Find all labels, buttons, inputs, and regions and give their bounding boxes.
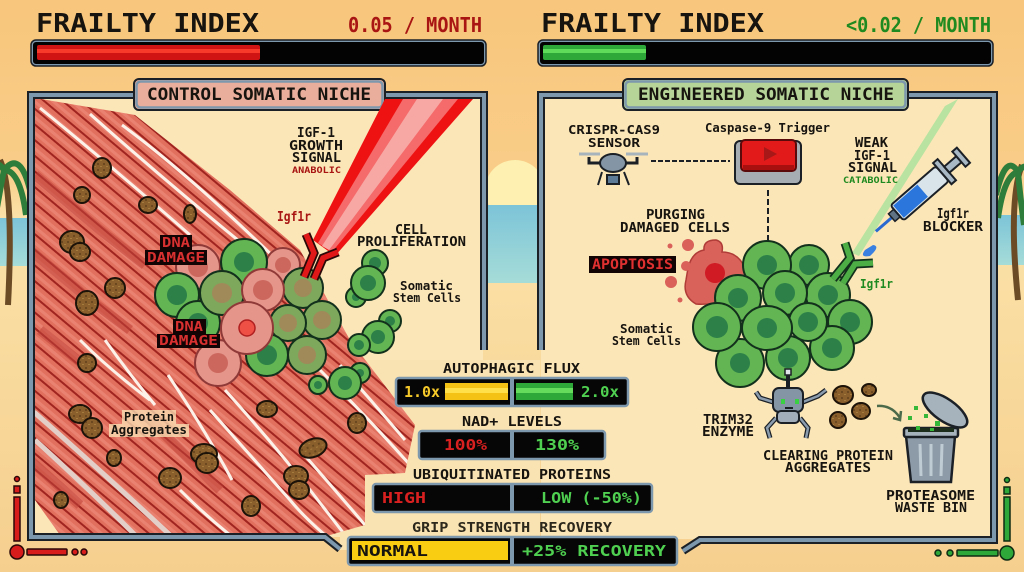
label: crispr-cas9 sensor: SENSOR <box>588 135 641 150</box>
label: crispr-cas9 sensor <box>568 122 660 150</box>
metric: nad+ levels <box>419 415 605 459</box>
label: weak igf-1 signal: SIGNAL <box>848 161 897 176</box>
label: igf-1 growth signal: SIGNAL <box>292 151 341 166</box>
protein aggregates: left <box>54 158 366 516</box>
metric: autophagic flux: 2.0x <box>581 383 619 401</box>
metric: nad+ levels: 100% <box>444 436 487 454</box>
icon: blocker drop <box>863 245 876 256</box>
label: igf1r blocker: Igf1r <box>937 207 969 222</box>
protein aggregates: right <box>830 384 876 428</box>
heading: left frailty index <box>36 9 482 39</box>
label: apoptosis: APOPTOSIS <box>592 257 673 273</box>
metric: autophagic flux: 1.0x <box>404 383 440 401</box>
label: clearing protein aggregates: CLEARING PROTEIN <box>763 449 893 464</box>
heading: left frailty index: 0.05 / MONTH <box>348 13 482 37</box>
stem cell cluster: control <box>155 239 341 386</box>
bar: left frailty <box>31 40 486 66</box>
label: proteasome waste bin: WASTE BIN <box>895 501 967 516</box>
label: somatic stem cells right: Stem Cells <box>612 334 681 348</box>
label: somatic stem cells left: Stem Cells <box>393 291 461 305</box>
muscle tissue <box>30 95 420 540</box>
label: weak igf-1 signal: IGF-1 <box>854 149 890 164</box>
label: trim32 enzyme <box>702 413 754 440</box>
label: protein aggregates: Protein <box>124 410 174 424</box>
hud corner: red <box>10 476 87 559</box>
label: weak igf-1 signal: CATABOLIC <box>843 176 898 186</box>
panel: engineered somatic niche <box>541 95 994 551</box>
free stem cells: proliferating <box>309 250 401 399</box>
frame: engineered panel <box>541 95 994 551</box>
label: dna damage upper <box>145 235 207 266</box>
dashed line: trigger to cells <box>767 190 769 241</box>
label: trim32 enzyme: TRIM32 <box>703 413 753 428</box>
heading: right frailty index: <0.02 / MONTH <box>846 13 991 37</box>
badge: control somatic niche <box>134 79 385 110</box>
label: crispr-cas9 sensor: CRISPR-CAS9 <box>568 122 660 137</box>
label: dna damage lower: DAMAGE <box>159 334 218 349</box>
heading: left frailty index: FRAILTY INDEX <box>36 9 259 39</box>
receptor: red igf1r <box>304 234 338 279</box>
label: cell proliferation <box>357 223 466 250</box>
heading: right frailty index: FRAILTY INDEX <box>541 9 764 39</box>
stem cell cluster: engineered <box>693 241 872 387</box>
dashed line: sensor to trigger <box>651 160 730 162</box>
metric: grip strength recovery <box>348 521 677 565</box>
badge: engineered somatic niche <box>623 79 908 110</box>
panel: control somatic niche <box>30 95 540 550</box>
label: weak igf-1 signal: WEAK <box>855 136 888 151</box>
label: dna damage lower: DNA <box>175 320 203 335</box>
icon: syringe <box>867 145 973 242</box>
hud corner: green <box>935 478 1014 560</box>
label: weak igf-1 signal <box>843 136 898 186</box>
label: proteasome waste bin: PROTEASOME <box>886 489 975 504</box>
label: somatic stem cells left <box>393 279 461 305</box>
label: dna damage upper: DNA <box>162 236 190 251</box>
label: purging damaged cells: DAMAGED CELLS <box>620 221 730 236</box>
label: proteasome waste bin <box>886 489 975 516</box>
arrow: to waste bin <box>877 406 901 420</box>
metric: nad+ levels: 130% <box>535 436 579 454</box>
metric: ubiquitinated proteins: LOW (-50%) <box>541 489 642 507</box>
beam: igf-1 growth signal <box>313 99 473 256</box>
label: somatic stem cells right: Somatic <box>620 322 673 336</box>
metric: ubiquitinated proteins: HIGH <box>382 489 426 507</box>
label: igf1r blocker: BLOCKER <box>923 220 983 235</box>
label: igf1r blocker <box>923 207 983 235</box>
metric: ubiquitinated proteins: UBIQUITINATED PROTEINS <box>413 468 611 483</box>
metric: grip strength recovery: NORMAL <box>357 542 428 560</box>
label: igf-1 growth signal: ANABOLIC <box>292 166 341 176</box>
label: protein aggregates: Aggregates <box>111 423 187 437</box>
badge: control somatic niche: CONTROL SOMATIC NICHE <box>147 85 371 105</box>
label: clearing protein aggregates: AGGREGATES <box>785 461 871 476</box>
apoptotic cell <box>665 239 745 304</box>
label: clearing protein aggregates <box>763 449 893 476</box>
label: dna damage upper: DAMAGE <box>147 251 205 266</box>
receptor: green igf1r <box>833 243 873 283</box>
label: somatic stem cells left: Somatic <box>400 279 453 293</box>
label: caspase-9 trigger: Caspase-9 Trigger <box>705 120 830 135</box>
beam: weak igf-1 signal <box>852 99 958 256</box>
metric: autophagic flux <box>396 362 628 406</box>
label: igf1r red: Igf1r <box>277 210 311 225</box>
label: igf1r green: Igf1r <box>860 276 893 291</box>
heading: right frailty index <box>541 9 991 39</box>
bar: right frailty <box>538 40 993 66</box>
label: dna damage lower <box>157 319 220 349</box>
icon: proteasome waste bin <box>904 386 973 482</box>
label: somatic stem cells right <box>612 322 681 348</box>
label: trim32 enzyme: ENZYME <box>702 425 754 440</box>
label: purging damaged cells <box>620 208 730 236</box>
metric: nad+ levels: NAD+ LEVELS <box>462 415 562 430</box>
icon: drone sensor <box>579 154 648 185</box>
label: igf-1 growth signal: GROWTH <box>289 139 343 154</box>
label: igf-1 growth signal: IGF-1 <box>297 126 335 141</box>
metric: grip strength recovery: +25% RECOVERY <box>522 542 666 560</box>
frame: control panel <box>31 95 484 549</box>
icon: caspase-9 trigger button <box>735 140 801 184</box>
metric: grip strength recovery: GRIP STRENGTH RECOVERY <box>412 521 612 536</box>
metric: autophagic flux: AUTOPHAGIC FLUX <box>443 362 580 377</box>
label: protein aggregates <box>109 410 189 437</box>
label: purging damaged cells: PURGING <box>646 208 705 223</box>
label: cell proliferation: PROLIFERATION <box>357 235 466 250</box>
badge: engineered somatic niche: ENGINEERED SOMATIC NICHE <box>638 85 894 105</box>
label: igf-1 growth signal <box>289 126 343 176</box>
metric: ubiquitinated proteins <box>373 468 652 512</box>
label: cell proliferation: CELL <box>395 223 427 238</box>
icon: trim32 robot <box>756 369 826 438</box>
